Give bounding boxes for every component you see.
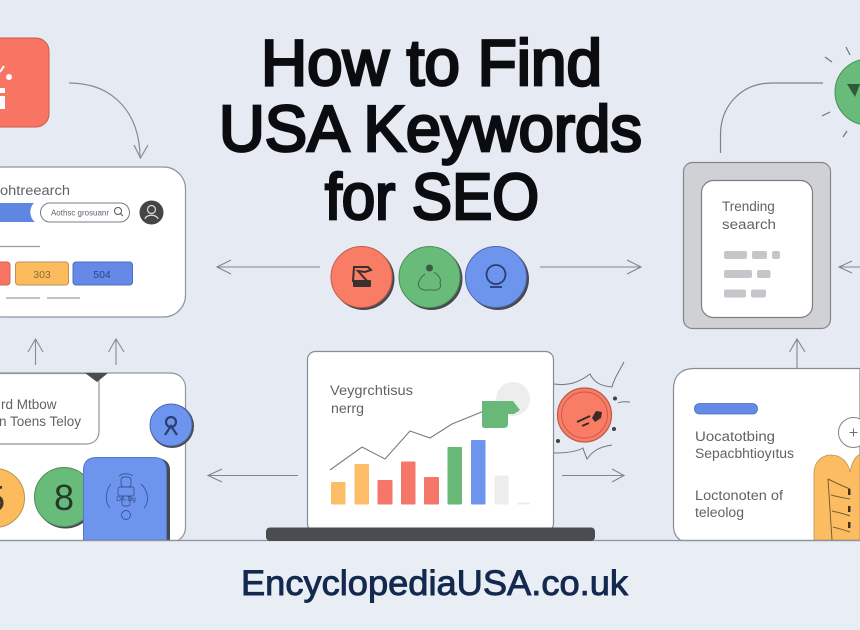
placeholder rows <box>724 251 780 298</box>
panel: method <box>0 373 194 540</box>
plus icon <box>838 418 860 448</box>
title <box>219 26 642 233</box>
icon: red burst badge <box>554 362 630 459</box>
panel: search research: 504 <box>93 269 111 281</box>
icon: blue circle <box>466 246 529 310</box>
text block two: Loctonoten of <box>695 488 783 503</box>
icon group: three circles <box>331 246 529 310</box>
icon: red circle <box>331 246 394 310</box>
title: for SEO <box>325 160 539 233</box>
title: How to Find <box>261 26 602 99</box>
trend line <box>330 411 484 470</box>
panel: search research: 303 <box>33 269 51 281</box>
laptop: keyword chart: nerrg <box>331 400 364 416</box>
arrow: laptop to method panel <box>208 469 298 482</box>
avatar icon <box>140 200 164 224</box>
icon: green number 8 <box>34 468 96 528</box>
metric chips <box>0 262 10 285</box>
icon: green sun top right <box>822 47 860 137</box>
panel heading: ohtreearch <box>0 183 70 198</box>
panel heading: Trending <box>722 199 775 214</box>
chart heading: Veygrchtisus <box>330 382 413 398</box>
icon: orange hand <box>814 455 860 540</box>
card text: rd Mtbow <box>1 397 57 412</box>
arrow: burst to right panel <box>562 469 624 482</box>
text block one: Uocatotbing <box>695 429 775 444</box>
arrow: up to trending panel <box>790 339 805 368</box>
panel: search research <box>0 167 186 317</box>
icon: blue robot card <box>84 458 170 540</box>
blue tab <box>0 203 35 222</box>
green flag <box>482 401 520 428</box>
title: USA Keywords <box>219 92 642 165</box>
arrows: up to search panel <box>28 339 124 365</box>
panel: method: n Toens Teloy <box>0 414 81 429</box>
laptop base <box>266 528 595 541</box>
arrow: curve to sun <box>720 83 823 153</box>
panel: trending search <box>684 162 830 328</box>
icon: red tile top left <box>0 38 49 127</box>
icon: blue robot card: DA·Dg <box>116 496 136 503</box>
footer brand: EncyclopediaUSA.co.uk <box>241 564 629 603</box>
bar chart <box>331 440 530 504</box>
arrow: right from centre icons <box>540 260 641 274</box>
laptop: keyword chart <box>308 352 554 532</box>
icon: orange number 5 <box>0 468 24 528</box>
grey dot <box>496 382 530 416</box>
panel: trending search: seaarch <box>722 217 776 232</box>
icon: green number 8: 8 <box>54 477 74 518</box>
panel: location: teleolog <box>695 505 744 520</box>
arrow: red tile to search panel <box>69 83 148 158</box>
inner card <box>0 374 99 444</box>
search box <box>40 203 130 222</box>
icon: green circle <box>399 246 462 310</box>
arrow: left from centre icons <box>217 260 320 274</box>
arrow: into trending panel from right <box>839 261 860 273</box>
panel: location <box>674 368 860 540</box>
panel: search research: Aothsc grosuanr <box>51 208 109 218</box>
panel: location: Sepacbhtioyıtus <box>695 446 794 461</box>
icon: blue badge <box>150 404 194 448</box>
blue pill <box>694 404 758 414</box>
